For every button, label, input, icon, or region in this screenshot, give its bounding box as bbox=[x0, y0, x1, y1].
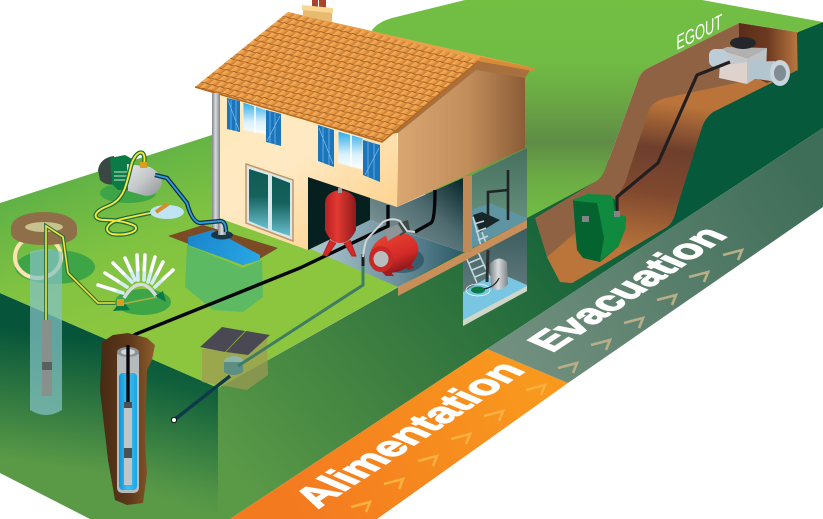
front lawn bbox=[0, 135, 398, 388]
lower sump room with pump bbox=[463, 228, 527, 326]
left soil face bbox=[0, 293, 218, 519]
oscillating sprinkler bbox=[98, 255, 173, 315]
right soil face bbox=[218, 22, 823, 519]
garage back wall bbox=[370, 178, 463, 252]
eave underside bbox=[391, 61, 530, 134]
flow chevrons: evacuation bbox=[558, 250, 742, 373]
house side wall bbox=[397, 68, 525, 207]
pump connector bbox=[140, 162, 147, 168]
upper sump room bbox=[472, 148, 527, 248]
pressure valve bbox=[362, 254, 364, 266]
drain line to garage bbox=[238, 265, 363, 366]
flow chevrons: alimentation bbox=[351, 385, 545, 512]
deep borehole bbox=[100, 333, 155, 505]
band: Evacuation bbox=[487, 128, 823, 383]
lifting station tank bbox=[573, 194, 626, 262]
window left bbox=[227, 98, 281, 146]
surface pump bbox=[98, 155, 162, 203]
suction hose to tank bbox=[155, 175, 226, 232]
rainwater tank bbox=[185, 222, 263, 312]
text: EGOUT: EGOUT bbox=[675, 10, 725, 55]
house front wall bbox=[219, 95, 397, 250]
garage dark interior bbox=[308, 177, 370, 250]
hose water puddle bbox=[150, 205, 184, 219]
house bbox=[195, 0, 535, 326]
sewer trench bbox=[535, 23, 798, 283]
roof bbox=[195, 12, 535, 142]
hill top bbox=[372, 0, 823, 240]
hose nozzle bbox=[156, 204, 168, 212]
booster pump and horizontal tank bbox=[363, 219, 424, 280]
drain outlet marker bbox=[171, 417, 177, 423]
buried drain line bbox=[174, 376, 230, 420]
sewer connection box bbox=[709, 37, 790, 86]
label: Evacuation: Evacuation bbox=[517, 221, 737, 357]
garage floor bbox=[308, 220, 463, 287]
downpipe bbox=[212, 93, 220, 235]
garden hose bbox=[96, 153, 160, 235]
well hose bbox=[46, 226, 120, 320]
garden well bbox=[11, 212, 95, 415]
band: Alimentation bbox=[230, 349, 568, 519]
chimney bbox=[302, 0, 333, 22]
vertical expansion vessel bbox=[323, 188, 356, 256]
label: Alimentation: Alimentation bbox=[282, 355, 535, 513]
patio door bbox=[246, 164, 293, 241]
rainwater collector box bbox=[200, 327, 270, 390]
buried tank hole bbox=[168, 225, 278, 265]
window right bbox=[318, 125, 380, 182]
dividing wall bbox=[463, 176, 472, 252]
drain pipe to sewer bbox=[617, 62, 730, 213]
supply line to house bbox=[128, 190, 435, 402]
floor slab edge bbox=[398, 220, 527, 296]
